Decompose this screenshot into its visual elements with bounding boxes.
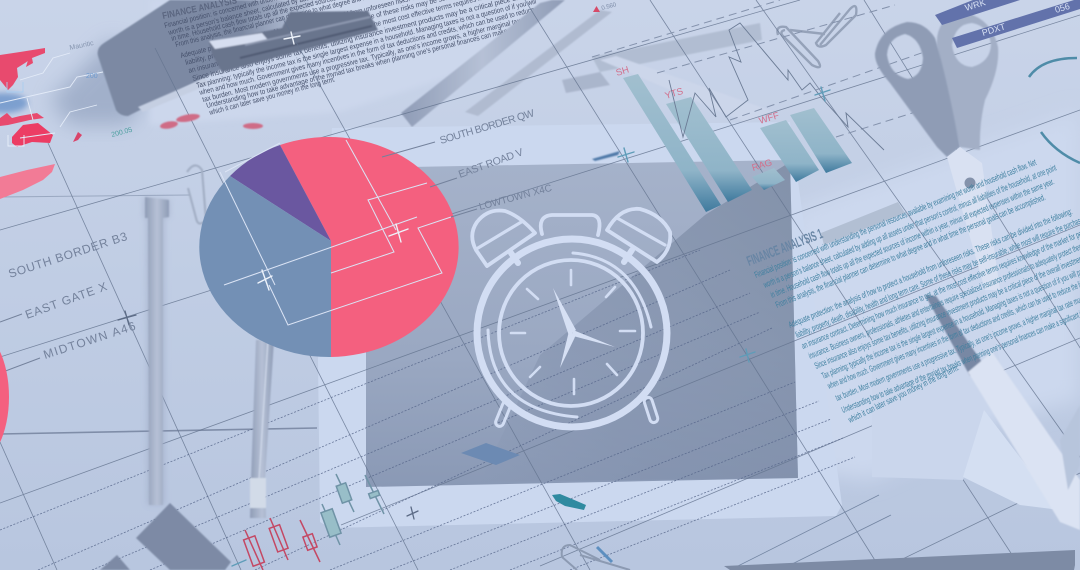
label South Border B3: SOUTH BORDER B3 [7,229,129,281]
dark pen bottom right [724,550,1075,570]
clock inner ring [499,260,643,406]
pie chart [199,137,459,357]
tablet screen [366,160,798,487]
bar labels: RAG [751,157,774,174]
red candles [244,518,320,570]
clock hands [553,288,615,368]
candlestick chart [244,474,384,570]
bar labels: WFF [758,110,781,127]
dashed lines upper right [592,0,960,137]
map: Australia [12,123,53,147]
crosshair marks [118,32,830,566]
scissors screw [964,178,976,188]
map: Japan [26,58,33,67]
paper clips top right [777,6,856,67]
teal splash [552,494,586,510]
text block: top left document: which it can later save you money in the long term. [207,75,336,117]
rolled paper top right [562,23,775,122]
pie slice purple [230,145,331,241]
bar WFF [760,120,819,182]
text block: top left document: tax burden. Most modern governments use a progressive tax. Typically, as one's income grows, a higher marginal tax rate [201,13,533,104]
right bell [607,209,670,262]
blue diamond [461,443,520,465]
paper sheet top [150,0,560,125]
label East Road V: EAST ROAD V [457,146,525,181]
pie slice blue [199,176,331,357]
pie slice red [280,137,459,357]
text block: right document: FINANCE ANALYSIS 1 [744,225,825,269]
bar chart [615,64,852,212]
top right purple bars: 056 [1054,1,1071,15]
note paper right [872,290,1060,510]
top right purple bars: PDXT [981,21,1007,38]
paper clip bottom [562,545,630,570]
teal candles [321,474,384,545]
notebook dark shape [98,0,320,116]
bar unnamed [790,108,852,173]
bar labels: SH [615,64,631,79]
clock feet [494,396,659,428]
label South Border QW: SOUTH BORDER QW [438,107,536,147]
map: New Zealand [73,132,82,142]
map connector lines [0,53,103,146]
zigzag line chart [669,23,884,150]
map label 200: 200 [86,73,98,80]
pen on document [209,11,378,72]
red triangle marker: 0.560 [601,2,618,12]
desk board edge lines [0,195,317,434]
screen dark wedge [480,162,798,482]
scissors left handle [875,22,960,157]
bar labels [615,64,781,174]
small clip by pie [187,165,206,224]
binder clip bottom left [100,503,231,570]
white pen right [925,295,1080,530]
label East Road V [430,146,525,187]
clock outer ring [477,239,667,427]
tablet frame [318,122,842,528]
heading bar right [821,202,905,245]
circuit overlay lines [220,140,451,325]
bar labels: YTS [664,86,685,102]
world map fragments [0,40,133,199]
alarm clock icon [472,209,670,428]
notebook shadow [50,40,160,125]
red triangle marker [593,2,618,12]
pens top centre [401,0,612,127]
label Midtown A46 [0,319,138,373]
blurred red marks [160,112,263,130]
centre pencil [250,340,274,518]
map: islands [0,113,44,126]
label Lowtown X4C [451,183,553,217]
map label Mauritic: Mauritic [69,40,95,52]
bar YTS [666,97,752,202]
label Lowtown X4C: LOWTOWN X4C [478,183,553,213]
left bell [472,210,535,266]
text block: right document [744,157,1080,425]
top right purple bars [935,0,1080,48]
scissors blade [947,147,1000,290]
clock partial arcs [488,253,651,417]
map label value: 200.05 [111,127,133,139]
teal gauge arcs [1029,58,1080,163]
dashed grid lines [0,250,855,570]
left pen [143,197,170,505]
map: Asia [0,48,45,90]
blue streak [592,151,620,161]
red partial circle left edge [0,330,9,464]
label East Gate X: EAST GATE X [23,279,109,322]
clock ticks [511,270,635,394]
paper sheet right [790,110,1080,480]
map: lower landmass [0,164,55,199]
text block: right document: which it can later save you money in the long term. [846,362,961,425]
bar RAG [752,168,785,190]
scissors [875,13,1000,290]
label Midtown A46: MIDTOWN A46 [42,319,138,362]
label South Border QW [382,107,536,157]
blue glow [0,93,28,113]
middle bell [541,215,600,235]
text block: top left document: Understanding how to take advantage of the myriad tax breaks when planning one's personal finances can make [205,26,508,110]
road labels with leaders [0,107,553,373]
thin lines bottom right [730,495,891,570]
bar SH [623,74,721,212]
scissors right handle [937,13,998,150]
